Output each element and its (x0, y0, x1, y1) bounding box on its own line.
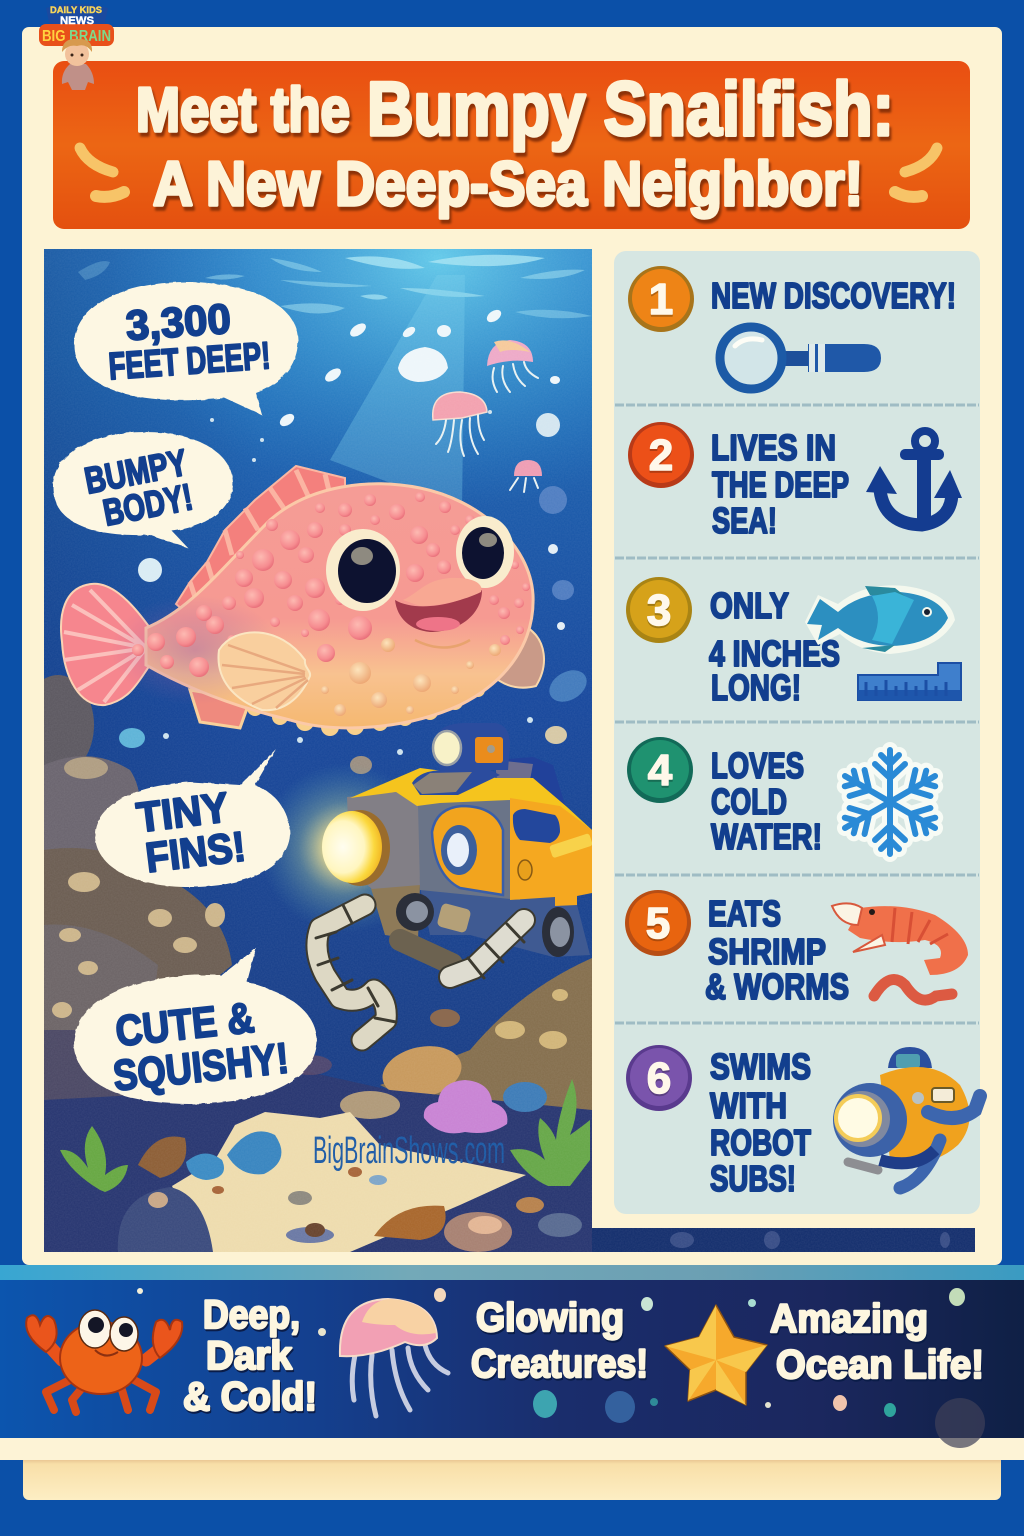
icon: worm (874, 980, 952, 1000)
bottom rocks (118, 1131, 975, 1252)
orange side panel right (510, 798, 592, 906)
icon: shrimp (832, 903, 968, 975)
purple coral (424, 1080, 507, 1133)
fact 4: loves cold water (627, 737, 943, 857)
speech bubble: 3,300 feet deep (74, 282, 298, 415)
number badge 2: 2 (649, 431, 673, 480)
water gradient (44, 249, 592, 1090)
fact 5 text: EATS (708, 893, 781, 934)
panel dividers (615, 405, 979, 1023)
tan block (436, 903, 472, 933)
lamp glow (260, 763, 430, 933)
number badge 4 (627, 737, 693, 803)
tan boulder (382, 1046, 462, 1094)
ribbon text: amazing ocean life: Ocean Life! (776, 1343, 984, 1387)
logo text: big brain: BIG BRAIN (42, 28, 111, 45)
panel background (614, 251, 980, 1214)
bottom facts ribbon (0, 1265, 1024, 1460)
small jellyfish group (433, 340, 542, 492)
number badge 1 (628, 266, 694, 332)
ribbon text: deep dark cold: Deep, (203, 1293, 300, 1337)
ribbon text: deep dark cold: & Cold! (183, 1375, 317, 1419)
purple shading (110, 595, 280, 705)
bubble text: TINY (134, 783, 231, 841)
watermark: BigBrainShows.com (313, 1130, 505, 1172)
side vent (518, 833, 593, 880)
bubble text: FEET DEEP! (107, 335, 272, 388)
bubble text (81, 442, 197, 536)
cream paper card (22, 27, 1002, 1265)
fact 6: swims with robot subs (626, 1045, 980, 1199)
mound highlights (495, 989, 568, 1049)
fact 4 text: WATER! (711, 816, 822, 857)
underwater scene panel (22, 249, 975, 1252)
logo banner (39, 24, 114, 46)
decorative swooshes (80, 148, 937, 197)
title line 1b: Bumpy Snailfish: (367, 67, 894, 152)
tan front block (370, 885, 420, 940)
fact 6 text: ROBOT (710, 1122, 811, 1163)
left robot arm (316, 905, 396, 1040)
mouth (395, 578, 482, 648)
fact 6 text (710, 1046, 811, 1199)
rear blue block (495, 757, 565, 805)
bubble text (134, 782, 248, 882)
number badge 4: 4 (648, 746, 673, 795)
bubble text (106, 991, 291, 1101)
icon: magnifying glass (720, 327, 881, 389)
banner background (53, 61, 970, 229)
bubble shape (74, 282, 298, 415)
camera head (433, 723, 510, 770)
grey front housing (347, 792, 420, 889)
panel: six facts (592, 249, 1002, 1228)
bubble text: SQUISHY! (111, 1034, 291, 1101)
title line 2: A New Deep-Sea Neighbor! (153, 150, 863, 219)
ribbon background (0, 1280, 1024, 1438)
grey side body (417, 795, 520, 900)
speech bubble: tiny fins (95, 749, 290, 887)
icon: mini robot sub (833, 1047, 980, 1188)
bubble text: CUTE & (113, 994, 257, 1056)
fact 6 text: SWIMS (710, 1046, 811, 1087)
fact 5: eats shrimp and worms (625, 890, 968, 1007)
lamp lens (322, 811, 382, 883)
fact 1 text: NEW DISCOVERY! (711, 275, 956, 316)
water surface ripples (78, 255, 592, 318)
fact 3 text: LONG! (711, 667, 801, 708)
bubbles (119, 307, 592, 774)
ribbon text: amazing ocean life (770, 1297, 984, 1387)
fact 2: lives in the deep sea (628, 422, 962, 541)
left plant (60, 1126, 128, 1192)
rear grey block (495, 760, 533, 782)
grain texture (44, 249, 975, 1252)
fact 6 text: SUBS! (710, 1158, 796, 1199)
fact 4 text: LOVES (711, 745, 804, 786)
number badge 3: 3 (647, 586, 671, 635)
lower tan paper strip (23, 1455, 1001, 1500)
fact 1: new discovery (628, 266, 956, 389)
surface glow (178, 249, 592, 468)
logo: Daily Kids News Big Brain (39, 4, 114, 90)
icon: starfish (665, 1305, 767, 1405)
underside (420, 887, 590, 957)
ribbon teal stripe (0, 1265, 1024, 1281)
ribbon text: glowing creatures: Glowing (476, 1296, 624, 1340)
fish body (146, 484, 533, 728)
yellow top (350, 768, 592, 838)
rock pebble near arm (430, 1009, 460, 1027)
icon: snowflake (837, 750, 943, 854)
blue base under head (412, 770, 500, 795)
small rocks behind sand (288, 1055, 547, 1119)
ribbon text: glowing creatures: Creatures! (471, 1342, 648, 1386)
bubble text: 3,300 (124, 295, 232, 349)
icon: anchor (866, 431, 962, 525)
cream cutout behind panel (592, 249, 1002, 1228)
bubble text: FINS! (143, 823, 248, 881)
right eye (456, 516, 514, 588)
bubble shape (74, 948, 317, 1104)
icon: ruler (858, 663, 961, 700)
bubble shape (53, 432, 233, 548)
robot submarine (260, 723, 593, 1040)
dark sea bed (44, 1070, 592, 1252)
fact 3 text: 4 INCHES (709, 633, 840, 674)
bubble text: BODY! (100, 476, 196, 534)
light beam (330, 275, 465, 510)
connector (400, 940, 452, 964)
fact 2 text: SEA! (712, 500, 777, 541)
fact 5 text: SHRIMP (708, 931, 826, 972)
ribbon text: glowing creatures (471, 1296, 648, 1386)
blue window (513, 809, 560, 843)
cream strip (0, 1438, 1024, 1460)
number badge 5: 5 (646, 899, 670, 948)
sand floor (169, 1112, 526, 1252)
bumps on lower body (321, 638, 501, 716)
fact 3 text: ONLY (710, 585, 789, 626)
fact 5 text: & WORMS (705, 966, 849, 1007)
fact 6 text: WITH (710, 1085, 787, 1126)
icon: jellyfish (340, 1299, 448, 1416)
bubble shape (95, 749, 290, 887)
number badge 6: 6 (647, 1054, 671, 1103)
number badge 1: 1 (649, 275, 673, 324)
floating particles (137, 1288, 985, 1448)
porthole (441, 825, 477, 875)
fact 3: only 4 inches long (626, 577, 961, 708)
title banner (53, 61, 970, 229)
mascot kid (62, 39, 94, 90)
fact 5 text (705, 893, 849, 1007)
pectoral fin (218, 632, 310, 710)
speech bubble: bumpy body (53, 432, 233, 548)
main character: bumpy snailfish (61, 466, 544, 736)
scalloped lower edge (247, 666, 504, 736)
speech bubble: cute and squishy (74, 948, 317, 1104)
right fin (492, 628, 544, 688)
number badge 5 (625, 890, 691, 956)
tail fin (61, 584, 150, 705)
fact 2 text: LIVES IN (711, 427, 836, 468)
number badge 3 (626, 577, 692, 643)
orange side panel left (432, 806, 503, 895)
icon: blue fish (805, 585, 955, 654)
bumps on upper body (132, 492, 530, 677)
top grey hatch (413, 772, 472, 794)
title line 1a: Meet the (136, 76, 350, 145)
fact 2 text (711, 427, 849, 541)
fact 2 text: THE DEEP (712, 464, 849, 505)
bubble text: BUMPY (81, 442, 191, 502)
fact 4 text (711, 745, 822, 857)
number badge 2 (628, 422, 694, 488)
fact 3 text (709, 585, 840, 708)
seafloor rocks left (44, 675, 232, 1100)
left shade (44, 249, 192, 760)
right rock mound (380, 958, 592, 1110)
number badge 6 (626, 1045, 692, 1111)
left eye (326, 529, 400, 611)
icon: crab (26, 1310, 182, 1412)
ribbon text: deep dark cold (183, 1293, 317, 1419)
ribbon text: deep dark cold: Dark (206, 1334, 293, 1378)
logo shield (46, 4, 108, 27)
wheels (396, 893, 574, 957)
bubble text (104, 292, 272, 388)
ribbon text: amazing ocean life: Amazing (770, 1297, 928, 1341)
logo text: daily kids: DAILY KIDS (50, 5, 102, 15)
logo text: news: NEWS (60, 15, 94, 27)
fact 4 text: COLD (711, 781, 787, 822)
lamp housing ring (330, 810, 390, 886)
right plant (510, 1079, 590, 1186)
dorsal fin (176, 466, 345, 625)
right robot arm (450, 920, 524, 978)
pelvic fin (190, 690, 250, 728)
